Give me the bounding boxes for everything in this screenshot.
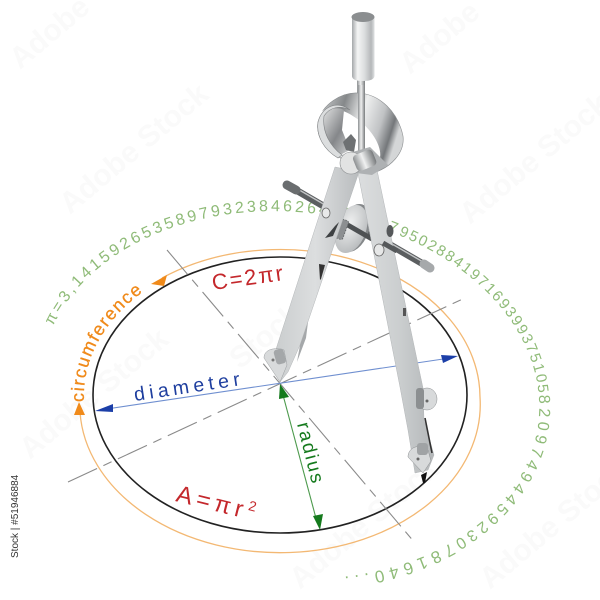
handle [352, 12, 374, 148]
dashed axis lines [68, 250, 467, 543]
right upper hinge [416, 388, 437, 410]
diameter label: diameter [132, 368, 246, 406]
radius arrow [279, 384, 323, 530]
orange circumference arc [80, 249, 480, 553]
radius label: radius [292, 420, 328, 487]
circle outline [93, 257, 467, 533]
circumference label: circumference [70, 286, 141, 402]
stock id: Stock | #51946884 [10, 474, 21, 558]
hub [340, 147, 388, 175]
faint watermark: Stock [223, 297, 307, 375]
faint watermark: Adobe Stock [283, 452, 445, 595]
pi digits ring: π=3,141592653589793238462643383279502884197169399375105 82097494459230781640... [46, 200, 550, 582]
faint watermark: Adobe Stock [53, 77, 215, 220]
area formula: A=πr [174, 481, 251, 524]
compass lead tip [421, 472, 427, 483]
left leg [272, 167, 359, 382]
right lower hinge [408, 443, 431, 473]
right leg [358, 170, 434, 473]
threaded adjusting bar [287, 184, 430, 268]
faint watermark: Adobe Stock [13, 322, 175, 465]
ring [307, 85, 403, 178]
adjusting wheel [328, 199, 377, 258]
compass [264, 12, 437, 483]
diameter arrow [95, 355, 458, 412]
icon: arrowhead circumference left [74, 402, 85, 415]
left foot hinge [264, 348, 287, 382]
circumference formula: C=2πr [210, 260, 286, 295]
area formula: 2 [247, 497, 263, 516]
icon: arrowhead circumference top [151, 275, 167, 286]
